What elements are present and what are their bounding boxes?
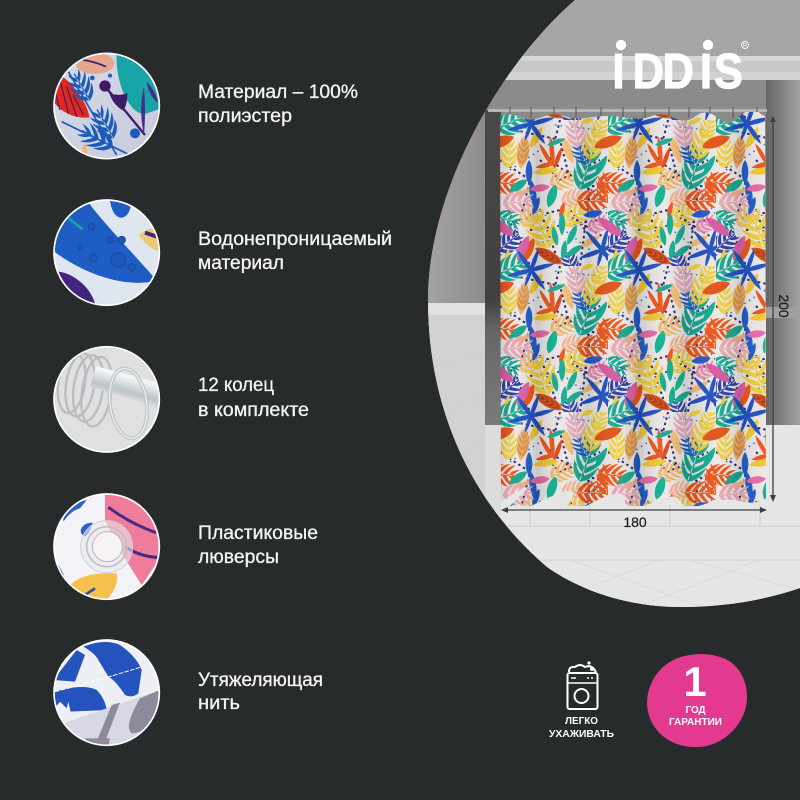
care label: ЛЕГКО	[565, 715, 598, 727]
feature photo: weighted thread	[53, 639, 160, 746]
feature photo: fabric print	[53, 52, 160, 160]
icon: washing machine	[568, 661, 598, 709]
shower rod	[488, 107, 767, 118]
dimension arrow: width	[501, 507, 767, 513]
feature photo: grommet	[53, 493, 160, 600]
feature title: waterproof: Водонепроницаемый	[198, 229, 392, 250]
warranty badge: ГАРАНТИИ	[669, 716, 722, 728]
feature title: weighted thread: нить	[198, 693, 240, 714]
logo: iddis: IDDIS	[612, 43, 743, 99]
feature photo: rings on rod	[53, 346, 160, 453]
feature title: material: полиэстер	[198, 106, 292, 127]
dimension arrow: height	[770, 116, 776, 502]
feature title: grommets	[198, 523, 318, 568]
feature title: weighted thread	[198, 670, 323, 714]
feature title: waterproof: материал	[198, 253, 284, 274]
warranty badge	[647, 654, 747, 747]
warranty badge: ГОД	[686, 704, 706, 716]
feature title: material: Материал – 100%	[198, 82, 358, 103]
feature title: grommets: люверсы	[198, 547, 279, 568]
feature title: rings	[198, 375, 309, 421]
curtain	[500, 112, 766, 506]
warranty badge: 1	[683, 658, 707, 705]
logo: iddis: R	[743, 43, 747, 49]
care label: УХАЖИВАТЬ	[549, 728, 614, 740]
dimension label: 180: 180	[623, 514, 647, 530]
feature title: rings: 12 колец	[198, 375, 274, 396]
feature title: rings: в комплекте	[198, 400, 309, 421]
photo: bathroom with curtain	[420, 0, 800, 626]
feature photo: water drops	[53, 199, 160, 306]
dimension label: 200: 200	[776, 294, 792, 318]
feature title: weighted thread: Утяжеляющая	[198, 670, 323, 691]
feature title: waterproof	[198, 229, 392, 274]
care label	[549, 715, 614, 740]
feature title: grommets: Пластиковые	[198, 523, 318, 544]
feature title: material	[198, 82, 358, 127]
